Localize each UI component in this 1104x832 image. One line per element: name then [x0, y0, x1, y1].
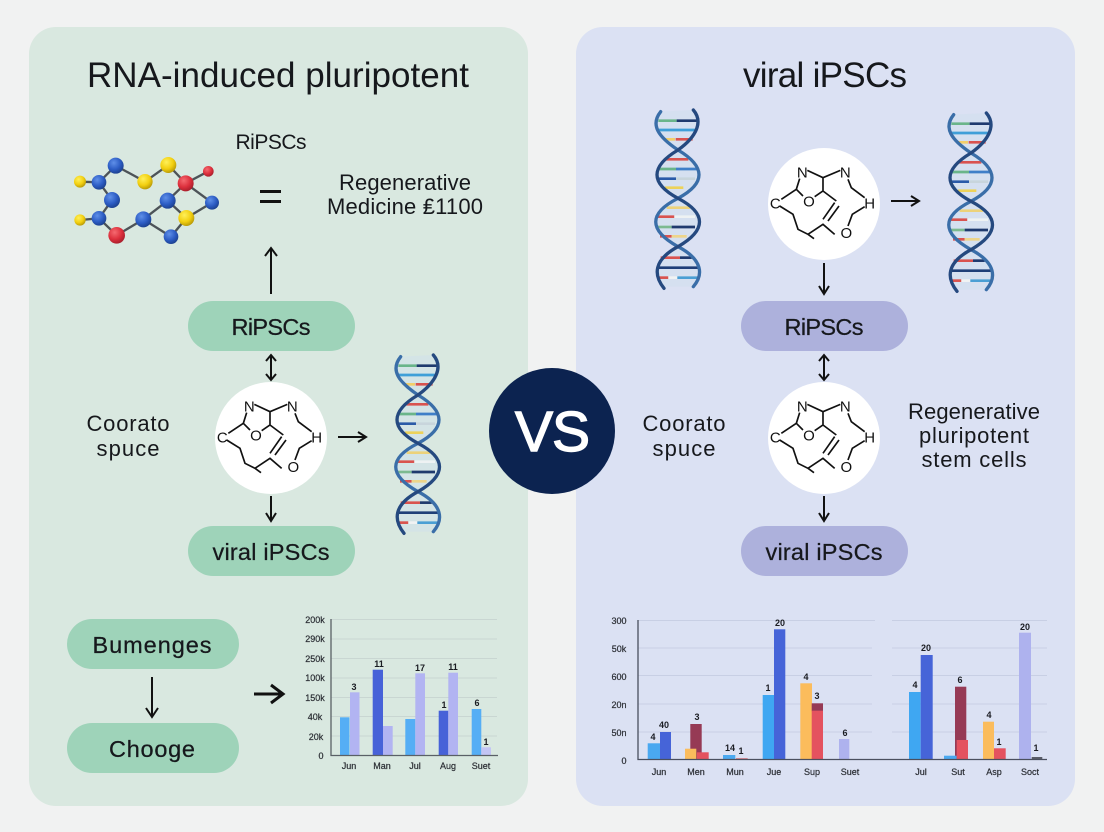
pill: viral iPSCs: viral iPSCs [766, 539, 882, 565]
arrow: down to viral iPSCs [819, 496, 829, 521]
bar chart: left: 3 [351, 682, 357, 692]
text: Regenerative Medicine: Medicine ₤1100 [327, 194, 483, 219]
icon: chemical ring structure top: C [770, 195, 781, 212]
bar chart: right: 1 [738, 746, 744, 756]
bar chart: left: 0 [318, 751, 324, 761]
pill: viral iPSCs [188, 526, 355, 576]
bar chart: right: Jul [915, 767, 927, 777]
bar chart: left: Man [373, 761, 391, 771]
bar chart: right: 4 [986, 710, 992, 720]
bar chart: right: Men [687, 767, 705, 777]
icon: chemical ring structure: H [311, 429, 322, 446]
pill: RiPSCs: RiPSCs [232, 314, 310, 340]
text: Coorato spuce: spuce [652, 436, 716, 461]
icon: chemical ring structure top: O [803, 194, 815, 211]
arrow: to bar chart [254, 685, 283, 703]
equals sign [260, 190, 281, 203]
arrow: Bumenges to Choose [146, 677, 158, 717]
icon: chemical ring structure middle: O [840, 459, 852, 476]
bar chart: right: 4 [912, 680, 918, 690]
bar chart: right: 6 [842, 728, 848, 738]
icon: chemical ring structure top: O [840, 225, 852, 242]
icon: chemical ring structure top: N [797, 165, 808, 182]
bar chart: right: Mun [726, 767, 744, 777]
bar chart: right: 3 [694, 712, 700, 722]
text: Coorato spuce: Coorato [86, 411, 170, 436]
text: Regenerative Medicine [327, 170, 483, 219]
bar chart: right: 600 [611, 672, 627, 682]
bar chart: left: Jun [342, 761, 356, 771]
icon: chemical ring structure middle: N [797, 399, 808, 416]
bar chart: left: 11 [374, 659, 384, 669]
bar chart: right: 20 [775, 618, 785, 628]
bar chart: left: 11 [448, 662, 458, 672]
bar chart: right: 0 [621, 756, 627, 766]
bar chart: left: Suet [472, 761, 491, 771]
icon: chemical ring structure top: H [864, 195, 875, 212]
bar chart: right: 4 [803, 672, 809, 682]
icon: chemical ring structure top [768, 148, 880, 260]
bar chart: right: 14 [725, 743, 735, 753]
bar chart: left: 200k [305, 615, 325, 625]
text: Regenerative pluripotent stem cells: stem cells [922, 447, 1026, 472]
bar chart: left [305, 615, 498, 771]
pill: Chooge: Chooge [109, 736, 195, 762]
arrow: right to DNA [891, 196, 919, 206]
arrow: up to molecule [265, 248, 277, 294]
title: RNA-induced pluripotent: RNA-induced pluripotent [87, 56, 469, 95]
icon: ball and stick molecule [74, 157, 219, 244]
panel: RNA-induced pluripotent [29, 27, 528, 806]
title: viral iPSCs: viral iPSCs [743, 56, 907, 95]
text: Coorato spuce [642, 411, 726, 461]
badge: VS: VS [515, 400, 590, 464]
bar chart: left: Jul [409, 761, 421, 771]
text: Coorato spuce: Coorato [642, 411, 726, 436]
bar chart: right: 50n [611, 728, 627, 738]
bar chart: right: Sut [951, 767, 965, 777]
bar chart: right: 50k [612, 644, 627, 654]
bar chart: left: 40k [308, 712, 323, 722]
bar chart: right: 3 [814, 691, 820, 701]
bar chart: right: 300 [611, 616, 627, 626]
bar chart: left: 1 [483, 737, 489, 747]
icon: chemical ring structure: N [287, 399, 298, 416]
pill: RiPSCs [188, 301, 355, 351]
bar chart: right: 1 [996, 737, 1002, 747]
pill: viral iPSCs: viral iPSCs [212, 539, 330, 565]
icon: DNA helix right [949, 113, 993, 291]
icon: DNA helix left [656, 110, 700, 288]
arrow: double vertical [266, 355, 276, 380]
bar chart: left: 17 [415, 663, 425, 673]
bar chart: right: Soct [1021, 767, 1040, 777]
bar chart: right: 1 [765, 683, 771, 693]
bar chart: right: 20n [611, 700, 627, 710]
text: Coorato spuce: spuce [96, 436, 160, 461]
bar chart: right: 20 [921, 643, 931, 653]
bar chart: right: 4 [650, 732, 656, 742]
panel: viral iPSCs [576, 27, 1075, 806]
icon: chemical ring structure middle: N [840, 399, 851, 416]
bar chart: left: 290k [305, 634, 325, 644]
icon: chemical ring structure: O [250, 428, 262, 445]
icon: chemical ring structure middle [768, 382, 880, 494]
bar chart: right [611, 616, 1047, 777]
bar chart: left: 250k [305, 654, 325, 664]
bar chart: right: Jun [652, 767, 666, 777]
pill: viral iPSCs [741, 526, 908, 576]
bar chart: right: Sup [804, 767, 820, 777]
bar chart: left: 100k [305, 673, 325, 683]
icon: chemical ring structure [215, 382, 327, 494]
arrow: down to RiPSCs [819, 263, 829, 294]
bar chart: right: Jue [767, 767, 781, 777]
arrow: right to DNA [338, 432, 366, 442]
label: RiPSCs: RiPSCs [236, 131, 306, 154]
icon: chemical ring structure: C [217, 429, 228, 446]
badge: VS [489, 368, 615, 494]
bar chart: left: Aug [440, 761, 456, 771]
bar chart: left: 150k [305, 693, 325, 703]
icon: chemical ring structure: N [244, 399, 255, 416]
bar chart: left: 6 [474, 698, 480, 708]
text: Regenerative pluripotent stem cells [908, 399, 1040, 472]
text: Regenerative pluripotent stem cells: Regenerative [908, 399, 1040, 424]
icon: chemical ring structure top: N [840, 165, 851, 182]
arrow: down to viral iPSCs [266, 496, 276, 521]
bar chart: right: 6 [957, 675, 963, 685]
bar chart: right: 20 [1020, 622, 1030, 632]
pill: RiPSCs [741, 301, 908, 351]
bar chart: left: 1 [441, 700, 447, 710]
bar chart: right: 40 [659, 720, 669, 730]
pill: Bumenges: Bumenges [92, 632, 212, 658]
icon: chemical ring structure middle: H [864, 429, 875, 446]
icon: chemical ring structure: O [287, 459, 299, 476]
bar chart: right: 1 [1033, 743, 1039, 753]
bar chart: right: Suet [841, 767, 860, 777]
icon: chemical ring structure middle: O [803, 428, 815, 445]
pill: Chooge [67, 723, 239, 773]
pill: Bumenges [67, 619, 239, 669]
arrow: double vertical [819, 355, 829, 380]
text: Regenerative pluripotent stem cells: pluripotent [919, 423, 1029, 448]
icon: DNA helix [396, 355, 440, 533]
text: Regenerative Medicine: Regenerative [339, 170, 471, 195]
bar chart: right: Asp [986, 767, 1002, 777]
bar chart: left: 20k [309, 732, 324, 742]
text: Coorato spuce [86, 411, 170, 461]
pill: RiPSCs: RiPSCs [784, 314, 864, 340]
icon: chemical ring structure middle: C [770, 429, 781, 446]
